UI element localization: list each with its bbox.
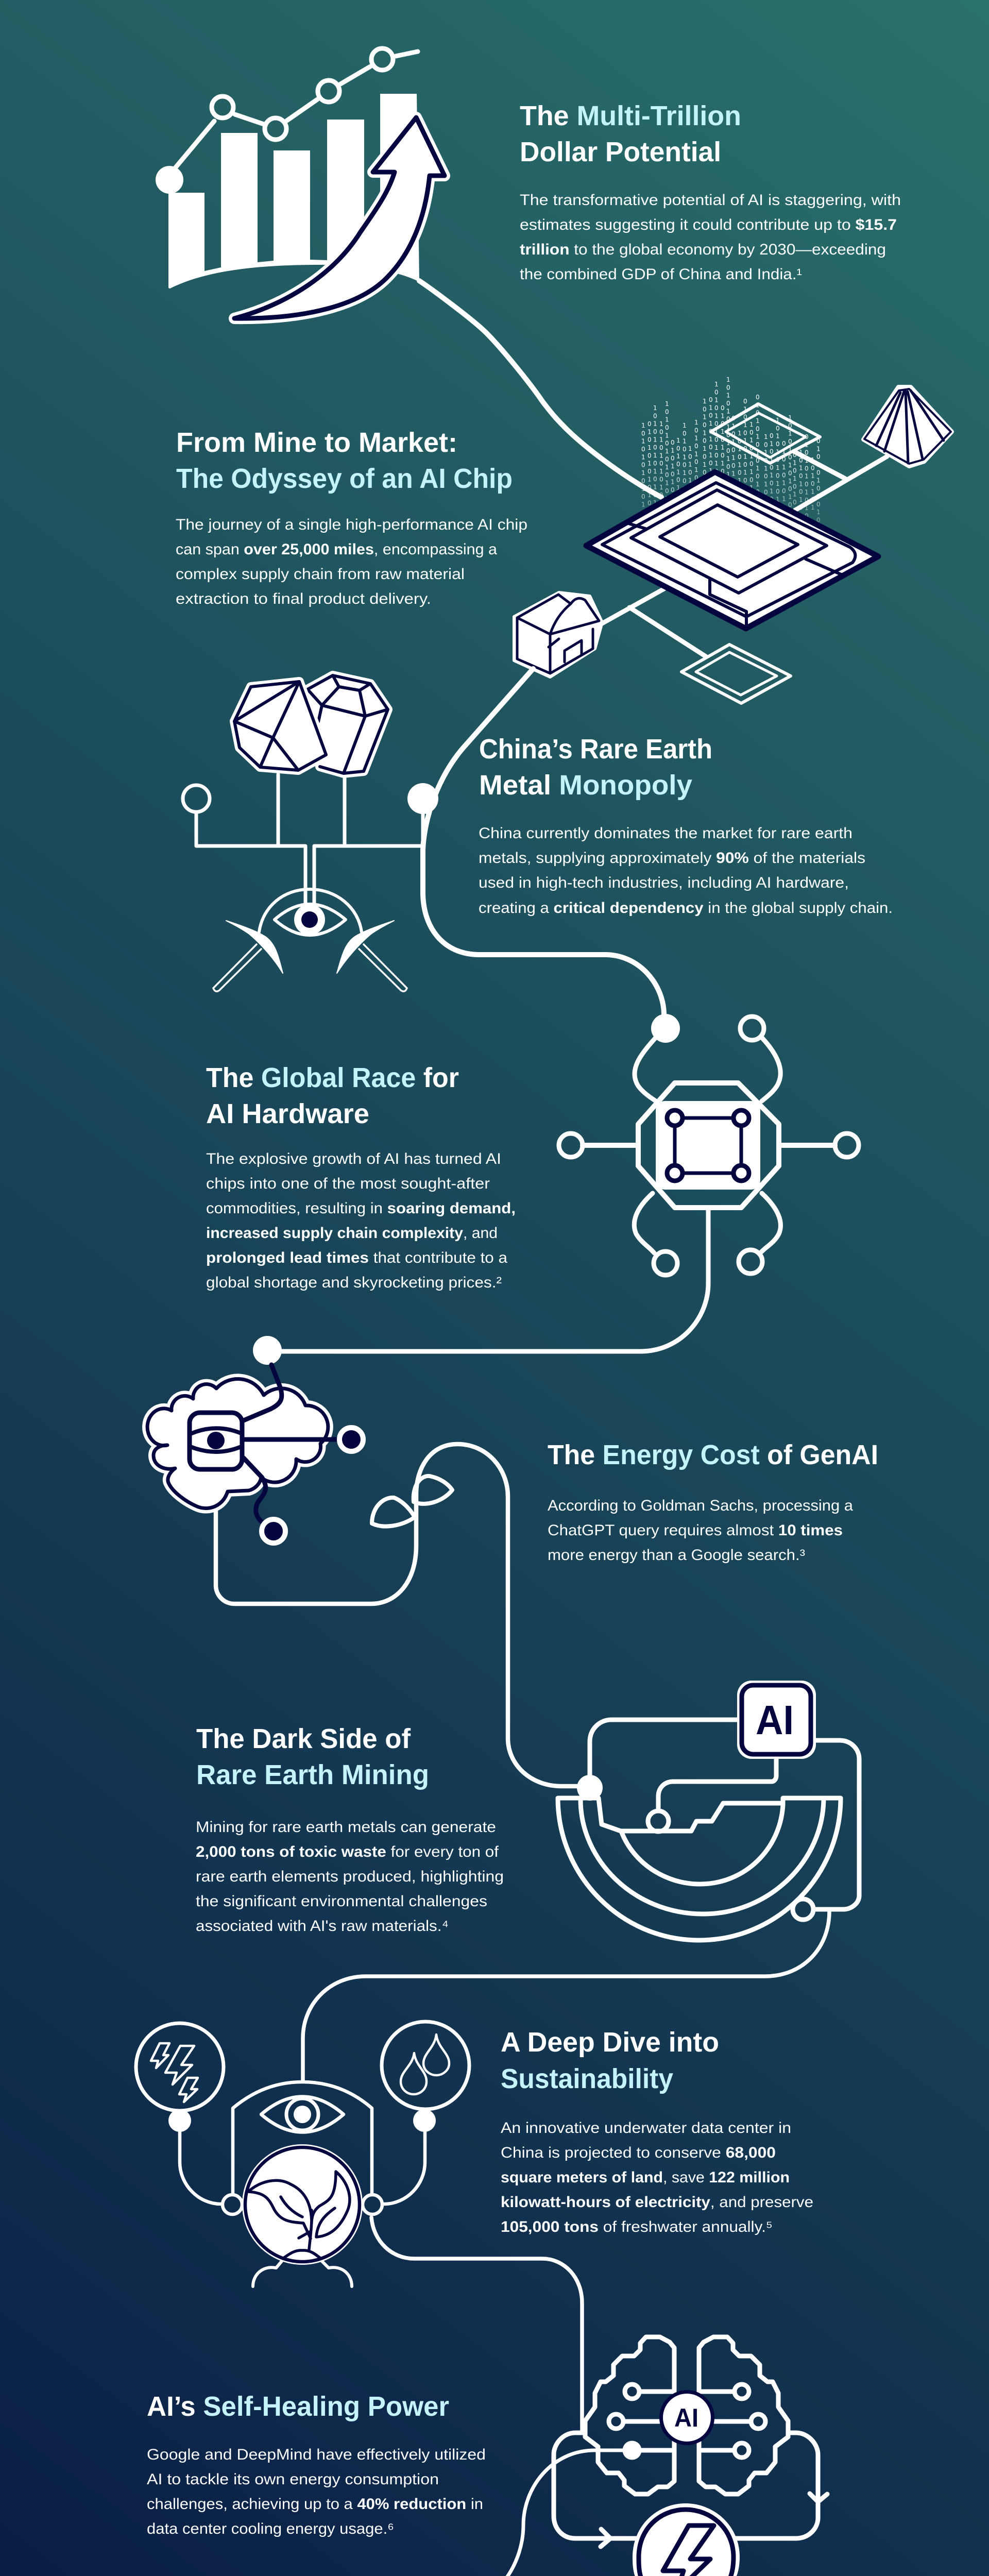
roots bbox=[253, 2261, 352, 2286]
connector: chart to chip bbox=[419, 281, 661, 497]
binary data rain behind chip: 1010101010101 bbox=[683, 422, 690, 524]
filled node bbox=[651, 1014, 680, 1043]
text block: dark side of mining bbox=[196, 1723, 504, 1935]
text block: from mine to market bbox=[176, 427, 527, 607]
body text: global shortage and skyrocketing prices.² bbox=[206, 1274, 502, 1291]
mine rings and ledge bbox=[558, 1798, 841, 1940]
body text: 105,000 tons of freshwater annually.⁵ bbox=[501, 2218, 773, 2235]
heading: global race bbox=[206, 1062, 459, 1129]
connector: brain to person bbox=[339, 2450, 632, 2576]
connectors: chip links bbox=[602, 451, 887, 656]
text block: global race for AI hardware bbox=[206, 1062, 516, 1291]
left brain hemisphere bbox=[585, 2337, 674, 2494]
binary data rain behind chip: 0101010101010101 bbox=[721, 404, 728, 530]
light bulb bbox=[636, 2506, 737, 2576]
heading: china's rare earth metal monopoly: Metal Monopoly bbox=[479, 770, 692, 801]
core circuit bbox=[667, 1110, 749, 1181]
binary data rain behind chip: 1010101010101010 bbox=[653, 404, 661, 530]
icon: rising bar chart with arrow bbox=[156, 48, 445, 318]
body text: According to Goldman Sachs, processing a bbox=[548, 1497, 853, 1514]
heading: the multi-trillion dollar potential: Dollar Potential bbox=[520, 137, 721, 167]
navy node lower bbox=[262, 1519, 285, 1543]
heading: a deep dive bbox=[501, 2027, 719, 2094]
body text: increased supply chain complexity, and bbox=[206, 1225, 498, 1242]
circuit lines bbox=[590, 1720, 859, 1909]
binary data rain behind chip: 1010101010101 bbox=[641, 422, 649, 524]
body text: metals, supplying approximately 90% of the materials bbox=[479, 850, 865, 867]
text block: energy cost bbox=[548, 1439, 878, 1564]
body text bbox=[147, 2446, 486, 2537]
binary data rain behind chip: 1010101010101010101 bbox=[726, 376, 734, 526]
binary data rain behind chip: 1010101010101 bbox=[788, 414, 796, 516]
heading: global race: The Global Race for bbox=[206, 1062, 459, 1093]
body text: The journey of a single high-performance AI chip bbox=[176, 516, 527, 533]
heading: from mine to market bbox=[176, 427, 513, 494]
heading: china's rare earth metal monopoly bbox=[479, 734, 712, 801]
binary data rain behind chip: 101010101 bbox=[688, 445, 696, 516]
binary data rain behind chip: 010101010101 bbox=[816, 437, 824, 532]
connector: chip to cloud bbox=[281, 1210, 708, 1351]
text block: China's rare earth monopoly bbox=[479, 734, 893, 917]
icon: circuit chip with nodes bbox=[559, 1014, 859, 1275]
text block: AI's self-healing power bbox=[147, 2391, 486, 2537]
arrow heads bbox=[601, 2494, 827, 2547]
binary data rain behind chip: 10101010101010101 bbox=[665, 400, 673, 534]
body text bbox=[176, 516, 527, 607]
body text bbox=[520, 192, 901, 283]
octagon housing bbox=[638, 1083, 779, 1208]
dots bbox=[168, 2109, 191, 2132]
body text bbox=[206, 1150, 516, 1291]
icon: lower diamond bbox=[681, 645, 791, 703]
body text: rare earth elements produced, highlighting bbox=[196, 1868, 504, 1885]
left rock bbox=[234, 682, 326, 770]
body text: China is projected to conserve 68,000 bbox=[501, 2144, 776, 2161]
body text: Mining for rare earth metals can generate bbox=[196, 1819, 496, 1836]
filled brain node bbox=[622, 2441, 642, 2460]
body text: square meters of land, save 122 million bbox=[501, 2169, 790, 2186]
body text: chips into one of the most sought-after bbox=[206, 1175, 490, 1192]
right pick axe bbox=[337, 921, 407, 991]
binary data rain behind chip: 1010101010101 bbox=[694, 419, 702, 521]
body text: estimates suggesting it could contribute up to $15.7 bbox=[520, 216, 897, 233]
right rock bbox=[308, 675, 388, 773]
icon: rare earth rocks and mining tools bbox=[183, 675, 438, 991]
heading: the dark side: Rare Earth Mining bbox=[196, 1759, 429, 1790]
body text: commodities, resulting in soaring demand, bbox=[206, 1200, 516, 1217]
body text: AI to tackle its own energy consumption bbox=[147, 2471, 439, 2488]
body text bbox=[196, 1819, 504, 1935]
body text: 2,000 tons of toxic waste for every ton of bbox=[196, 1843, 499, 1860]
icon: AI brain and light bulb loop bbox=[554, 2337, 827, 2576]
brain outline bbox=[147, 1379, 328, 1508]
binary data rain behind chip bbox=[642, 377, 820, 522]
icon: leaves on connector bbox=[372, 1476, 452, 1527]
node: hollow bbox=[183, 785, 210, 812]
body text: data center cooling energy usage.⁶ bbox=[147, 2520, 394, 2537]
heading: the dark side bbox=[196, 1723, 429, 1790]
connector: sustainability to brain bbox=[371, 2217, 582, 2433]
body text: An innovative underwater data center in bbox=[501, 2120, 791, 2137]
tombstone frame bbox=[233, 2082, 372, 2193]
navy leads bbox=[244, 1365, 336, 1522]
icon: factory house bbox=[514, 592, 602, 677]
connector: cloud to mine bbox=[216, 1444, 579, 1786]
binary data rain behind chip: 01010101010101010 bbox=[709, 396, 717, 530]
heading: from mine to market: The Odyssey of an AI Chip bbox=[176, 463, 513, 494]
binary data rain behind chip: 0101010101010101 bbox=[743, 398, 751, 523]
binary data rain behind chip: 01010101010 bbox=[770, 432, 777, 518]
heading: the dark side: The Dark Side of bbox=[196, 1723, 411, 1754]
body text bbox=[501, 2120, 813, 2235]
body text: The transformative potential of AI is staggering, with bbox=[520, 192, 901, 209]
binary data rain behind chip: 101010101010 bbox=[738, 430, 745, 524]
hollow joints bbox=[223, 2195, 242, 2214]
binary data rain behind chip: 1010101010101 bbox=[776, 417, 783, 519]
binary data rain behind chip: 0101010101010 bbox=[647, 420, 655, 522]
plant disc bbox=[242, 2144, 363, 2265]
body text: the combined GDP of China and India.¹ bbox=[520, 266, 802, 283]
AI badge: AI bbox=[674, 2403, 698, 2432]
heading: china's rare earth metal monopoly: China’s Rare Earth bbox=[479, 734, 712, 765]
connector node bbox=[253, 1336, 282, 1365]
binary data rain behind chip: 01010101010 bbox=[805, 433, 812, 519]
arch bbox=[259, 889, 362, 932]
body text bbox=[548, 1497, 853, 1564]
side leads bbox=[583, 1143, 835, 1148]
body text: China currently dominates the market for rare earth bbox=[479, 825, 852, 842]
binary data rain behind chip: 10101010101010101 bbox=[703, 398, 710, 532]
eye bbox=[275, 904, 346, 935]
heading: a deep dive: Sustainability bbox=[501, 2063, 673, 2094]
icon: gem bbox=[863, 387, 952, 466]
binary data rain behind chip: 010101010 bbox=[671, 439, 678, 510]
icon: AI chip bbox=[586, 472, 878, 629]
body text: ChatGPT query requires almost 10 times bbox=[548, 1522, 843, 1539]
body text: prolonged lead times that contribute to a bbox=[206, 1249, 507, 1266]
binary data rain behind chip: 101010101010101010 bbox=[714, 381, 722, 522]
binary data rain behind chip: 1010101 bbox=[811, 456, 819, 511]
loop with arrows bbox=[554, 2433, 818, 2538]
heading: the multi-trillion dollar potential bbox=[520, 100, 741, 167]
body text: trillion to the global economy by 2030—exceeding bbox=[520, 241, 886, 258]
hollow nodes bbox=[648, 1811, 669, 1832]
dot right bbox=[413, 2109, 436, 2132]
eye bbox=[261, 2097, 344, 2132]
eye panel bbox=[190, 1413, 242, 1469]
icon: brain cloud with eye bbox=[147, 1336, 363, 1543]
icon: small diamond above chip bbox=[711, 404, 820, 463]
binary data rain behind chip: 0101010101 bbox=[782, 440, 790, 518]
binary data rain behind chip: 101010101 bbox=[799, 449, 807, 519]
body text: challenges, achieving up to a 40% reduction in bbox=[147, 2496, 483, 2513]
text block: deep dive into sustainability bbox=[501, 2027, 813, 2235]
heading: global race: AI Hardware bbox=[206, 1098, 369, 1129]
rock circuit lines bbox=[196, 774, 423, 904]
binary data rain behind chip: 10101010101 bbox=[764, 433, 772, 519]
disc ring bbox=[245, 2147, 360, 2262]
right brain hemisphere bbox=[699, 2337, 788, 2494]
AI box: AI bbox=[756, 1697, 794, 1743]
body text bbox=[479, 825, 893, 917]
hollow nodes bbox=[559, 1016, 859, 1275]
body text: Google and DeepMind have effectively utilized bbox=[147, 2446, 486, 2463]
text block: multi-trillion potential bbox=[520, 100, 901, 283]
upper tendrils bbox=[634, 1038, 780, 1253]
heading: self-healing power: AI’s Self-Healing Power bbox=[147, 2391, 449, 2422]
AI badge bbox=[661, 2392, 713, 2443]
heading: from mine to market: From Mine to Market: bbox=[176, 427, 457, 458]
binary data rain behind chip: 10101010101010 bbox=[749, 421, 757, 531]
plant bbox=[248, 2172, 350, 2259]
connector: mine to sustainability bbox=[303, 1911, 829, 2081]
heading: a deep dive: A Deep Dive into bbox=[501, 2027, 719, 2058]
chip core bbox=[656, 1101, 760, 1190]
body text: creating a critical dependency in the global supply chain. bbox=[479, 900, 893, 917]
junction node bbox=[577, 1775, 603, 1801]
energy circle bbox=[136, 2023, 224, 2111]
heading: the multi-trillion dollar potential: The Multi-Trillion bbox=[520, 100, 741, 131]
water circle bbox=[382, 2022, 469, 2109]
binary data rain behind chip: 01010101010101010 bbox=[756, 394, 763, 528]
heading: energy cost of genai: The Energy Cost of GenAI bbox=[548, 1439, 878, 1470]
body text: used in high-tech industries, including AI hardware, bbox=[479, 874, 849, 891]
body text: extraction to final product delivery. bbox=[176, 590, 431, 607]
body text: can span over 25,000 miles, encompassing a bbox=[176, 541, 497, 558]
body text: kilowatt-hours of electricity , and preserve bbox=[501, 2194, 813, 2211]
AI box bbox=[737, 1681, 816, 1759]
binary data rain behind chip: 1010101010 bbox=[676, 437, 684, 515]
connector: house to chip two bbox=[423, 669, 664, 1015]
body text: the significant environmental challenges bbox=[196, 1893, 487, 1910]
body text: associated with AI's raw materials.⁴ bbox=[196, 1918, 449, 1935]
navy node right bbox=[339, 1428, 363, 1451]
icon: open-pit mine with AI box bbox=[303, 1681, 859, 2081]
body text: complex supply chain from raw material bbox=[176, 566, 465, 583]
binary data rain behind chip: 01010101 bbox=[793, 451, 800, 514]
stems bbox=[180, 2130, 425, 2204]
hollow joint right bbox=[363, 2195, 382, 2214]
body text: more energy than a Google search.³ bbox=[548, 1547, 805, 1564]
body text: The explosive growth of AI has turned AI bbox=[206, 1150, 501, 1167]
binary data rain behind chip: 01010101010101 bbox=[731, 415, 739, 524]
node: filled bbox=[407, 783, 438, 814]
left pick axe bbox=[213, 921, 283, 991]
icon: sustainability plant, eye, energy and water bbox=[136, 2022, 469, 2286]
binary data rain behind chip: 1010101010101 bbox=[659, 420, 667, 522]
